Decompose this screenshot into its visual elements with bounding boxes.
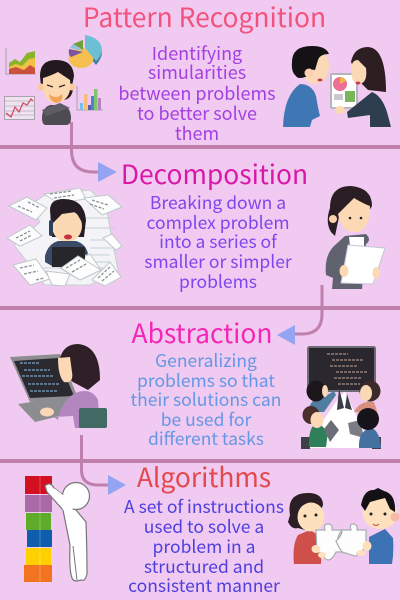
text: Decomposition description: Breaking down a [150,190,286,215]
text: Decomposition description: complex problem [146,210,290,235]
icon: team meeting with screen [301,347,381,449]
text: Algorithms description: problem in a [153,534,255,559]
text: Algorithms description: used to solve a [144,514,264,539]
icon: two people with puzzle pieces [288,488,400,564]
icon: programmer at laptop [10,344,107,428]
text: Abstraction description: problems so that [137,368,275,393]
text: Pattern Recognition description: simularities [148,59,246,85]
text: Pattern Recognition description: them [175,120,219,146]
text: Pattern Recognition description: Identifying [152,40,242,66]
text: Abstraction description: Generalizing [155,348,257,373]
icon: area chart [6,48,36,74]
icon: person stacking blocks [24,476,90,582]
title: Algorithms: Algorithms [137,456,271,495]
icon: woman buried in papers [7,188,122,286]
arrow: pattern recognition to decomposition [72,122,117,182]
title: Decomposition: Decomposition [121,153,308,192]
text: Abstraction description: different tasks [148,426,264,451]
icon: pie chart [68,35,102,68]
text: Pattern Recognition description: to better solve [137,100,257,126]
title: Abstraction: Abstraction [132,312,272,351]
icon: line chart [4,96,34,120]
text: Abstraction description: be used for [161,407,252,432]
arrow: abstraction to algorithms [82,435,126,495]
text: Algorithms description: consistent manner [128,573,280,598]
text: Algorithms description: structured and [144,554,264,579]
icon: two people with tablet [283,46,391,127]
icon: thinking woman [38,60,76,125]
text: Abstraction description: their solutions can [131,387,281,412]
text: Algorithms description: A set of instructions [124,494,284,519]
icon: woman reading document [326,186,385,289]
text: Decomposition description: problems [179,269,257,294]
arrow: decomposition to abstraction [277,285,322,345]
text: Decomposition description: smaller or simpler [144,249,292,274]
text: Pattern Recognition description: between problems [118,80,276,106]
icon: bar chart [77,86,103,110]
text: Decomposition description: into a series of [159,229,278,254]
